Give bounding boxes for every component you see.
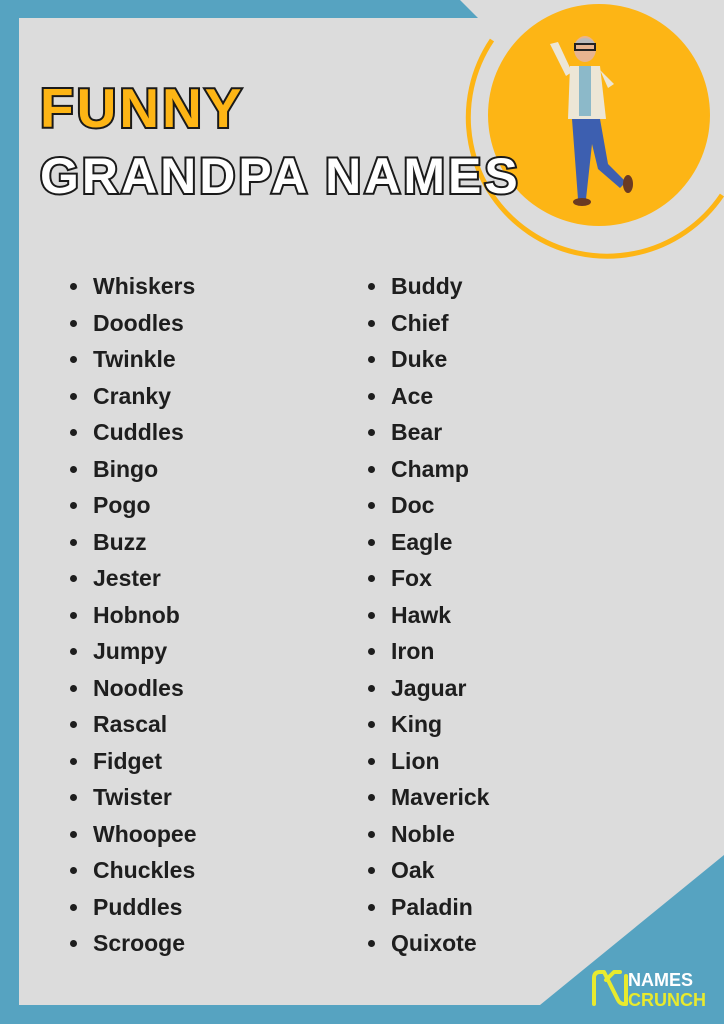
list column 1: Noodles	[93, 674, 184, 700]
logo	[592, 970, 706, 1010]
list column 1	[70, 273, 196, 956]
list column 1: Cuddles	[93, 419, 184, 445]
list column 2: King	[391, 711, 442, 737]
list column 2: Ace	[391, 382, 433, 408]
list column 2: Bear	[391, 419, 442, 445]
title	[40, 77, 521, 204]
list column 1: Chuckles	[93, 857, 195, 883]
list column 1: Hobnob	[93, 602, 180, 628]
list column 2: Doc	[391, 492, 434, 518]
logo: CRUNCH	[628, 990, 706, 1010]
list column 1: Buzz	[93, 528, 147, 554]
list column 2: Eagle	[391, 528, 452, 554]
list column 1: Jester	[93, 565, 161, 591]
list column 2: Fox	[391, 565, 432, 591]
list column 1: Scrooge	[93, 930, 185, 956]
list column 2: Duke	[391, 346, 447, 372]
list column 2: Buddy	[391, 273, 463, 299]
list column 1: Twister	[93, 784, 172, 810]
list column 2: Oak	[391, 857, 434, 883]
list column 1: Jumpy	[93, 638, 167, 664]
list column 1: Pogo	[93, 492, 150, 518]
list column 2: Quixote	[391, 930, 477, 956]
title: GRANDPA NAMES	[40, 148, 521, 204]
list column 2: Jaguar	[391, 674, 466, 700]
list column 1: Puddles	[93, 894, 182, 920]
list column 1: Twinkle	[93, 346, 176, 372]
list column 1: Rascal	[93, 711, 167, 737]
list column 2: Maverick	[391, 784, 489, 810]
list column 1: Whoopee	[93, 820, 196, 846]
list column 1: Cranky	[93, 382, 171, 408]
list column 2: Lion	[391, 748, 440, 774]
list column 2: Iron	[391, 638, 434, 664]
list column 2: Paladin	[391, 894, 473, 920]
list column 2: Champ	[391, 456, 469, 482]
list column 2	[368, 273, 490, 956]
list column 1: Fidget	[93, 748, 162, 774]
decorative ring	[468, 40, 722, 256]
title: FUNNY	[40, 77, 244, 139]
list column 2: Chief	[391, 310, 448, 336]
logo: NAMES	[628, 970, 693, 990]
list column 2: Hawk	[391, 602, 451, 628]
list column 1: Whiskers	[93, 273, 195, 299]
list column 2: Noble	[391, 820, 455, 846]
list column 1: Doodles	[93, 310, 184, 336]
icon: yellow circle with grandpa	[488, 4, 710, 226]
list column 1: Bingo	[93, 456, 158, 482]
